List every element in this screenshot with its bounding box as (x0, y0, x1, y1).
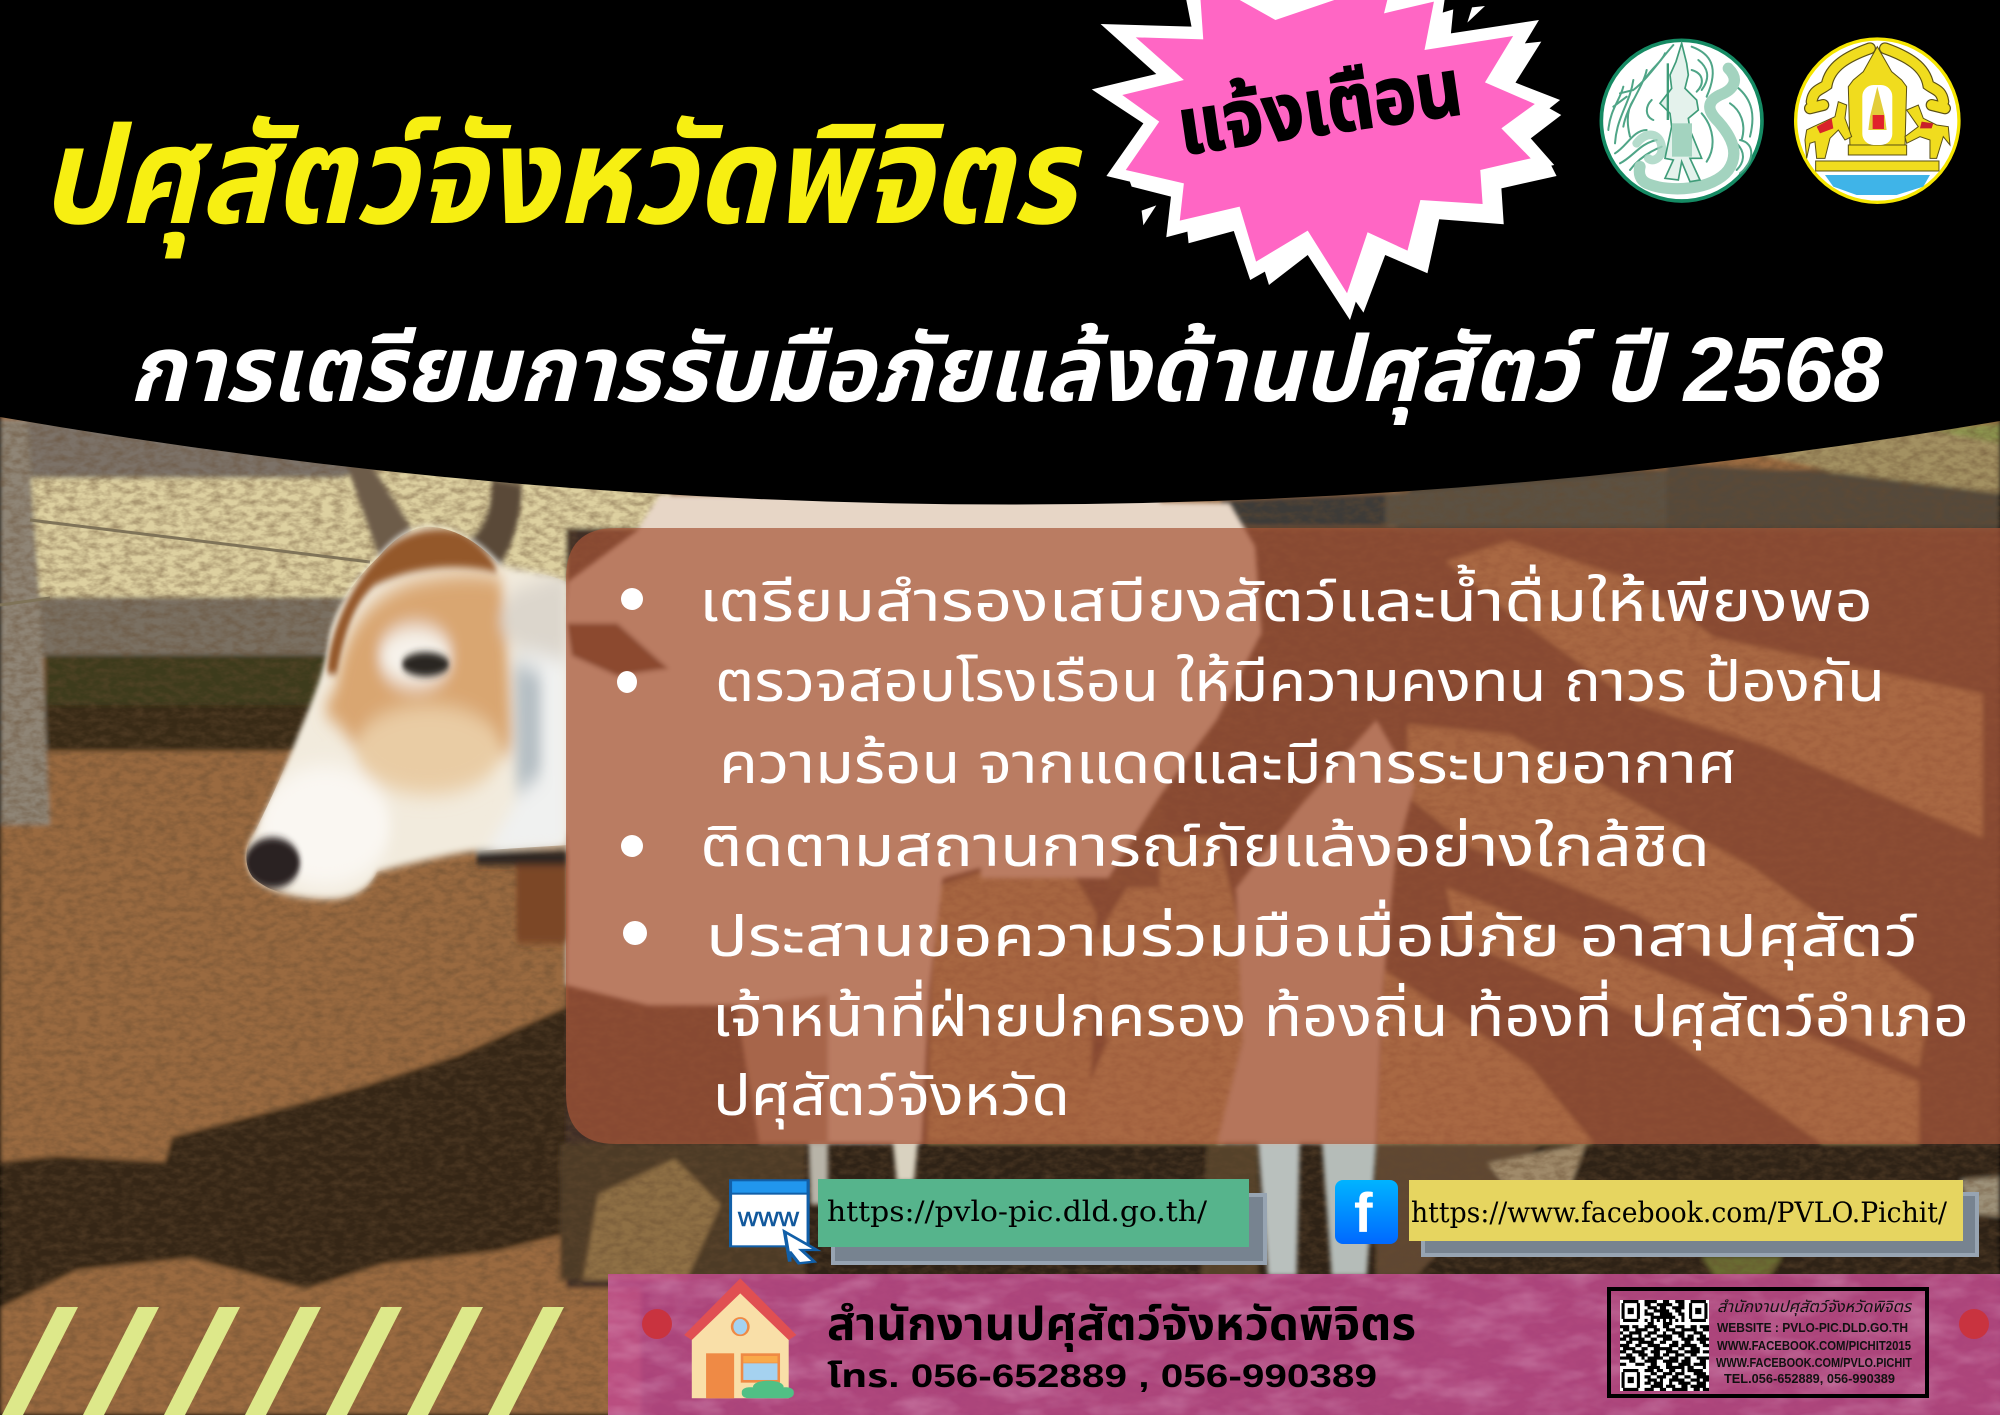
QR card text: TEL.056-652889, 056-990389 (1724, 1372, 1895, 1386)
corner stripes (2, 1307, 564, 1415)
bullet 2: ความร้อน จากแดดและมีการระบายอากาศ (719, 732, 1737, 795)
ornament scrolls (1608, 45, 1752, 173)
temple gate and animals (1805, 47, 1950, 171)
background photo: cow in a pen (0, 400, 2000, 1415)
right red dot (1959, 1309, 1989, 1339)
bullet 3: ติดตามสถานการณ์ภัยแล้งอย่างใกล้ชิด (700, 815, 1710, 878)
ground grain texture (0, 420, 2000, 1415)
bullet 4: ปศุสัตว์จังหวัด (713, 1064, 1070, 1129)
QR card text (1716, 1299, 1912, 1386)
bullet 4: เจ้าหน้าที่ฝ่ายปกครอง ท้องถิ่น ท้องที่ ปศุสัตว์อำเภอ (712, 979, 1969, 1050)
subtitle: การเตรียมการรับมือภัยแล้งด้านปศุสัตว์ ปี 2568 (129, 319, 1884, 426)
bullet 4: ประสานขอความร่วมมือเมื่อมีภัย อาสาปศุสัตว์ (706, 899, 1918, 970)
standing deity figure (1660, 43, 1702, 182)
starburst badge: alert (1092, 0, 1561, 320)
bullet 2: ตรวจสอบโรงเรือน ให้มีความคงทน ถาวร ป้องกัน (715, 650, 1885, 713)
icon: facebook (1335, 1180, 1398, 1244)
office name: สำนักงานปศุสัตว์จังหวัดพิจิตร (827, 1298, 1416, 1352)
fence wire (0, 520, 370, 605)
link: facebook page (1409, 1180, 1977, 1255)
QR card text: สำนักงานปศุสัตว์จังหวัดพิจิตร (1717, 1299, 1912, 1317)
title: ปศุสัตว์จังหวัดพิจิตร (40, 100, 1083, 259)
scrolling arms (1810, 48, 1945, 108)
footer band (608, 1274, 2000, 1415)
QR card (1609, 1289, 1927, 1396)
link: website (818, 1179, 1265, 1263)
naga body (1637, 68, 1734, 189)
link: facebook page: https://www.facebook.com/PVLO.Pichit/ (1411, 1196, 1948, 1229)
straw seen through the panel (1064, 449, 2000, 1143)
www label: www (737, 1202, 800, 1232)
link: website: https://pvlo-pic.dld.go.th/ (827, 1195, 1208, 1228)
bullet 4 (623, 899, 1969, 1129)
logo: department seal (yellow) (1796, 39, 1959, 202)
left red dot (642, 1309, 672, 1339)
cow head and neck (245, 458, 566, 943)
cow body under panel (560, 495, 1415, 1276)
top right fence and straw (1221, 423, 2000, 527)
QR code (1620, 1300, 1709, 1391)
ground, fence and straw (0, 400, 2000, 1415)
panel: advice list (566, 528, 2000, 1144)
icon: facebook: f (1354, 1181, 1373, 1244)
bullet 2 (617, 650, 1885, 795)
phone numbers: โทร. 056-652889 , 056-990389 (827, 1358, 1377, 1394)
QR card text: WEBSITE : PVLO-PIC.DLD.GO.TH (1717, 1321, 1908, 1335)
badge text: แจ้งเตือน (1172, 42, 1467, 172)
bullet 1: เตรียมสำรองเสบียงสัตว์และน้ำดื่มให้เพียงพอ (699, 564, 1873, 633)
second cow (1217, 720, 1415, 1143)
icon: house (684, 1278, 796, 1398)
lower ground (640, 1144, 2000, 1415)
logo: provincial seal (green) (1601, 40, 1762, 201)
black header band with curved edge (0, 0, 2000, 505)
QR card text: WWW.FACEBOOK.COM/PICHIT2015 (1717, 1339, 1911, 1353)
QR card text: WWW.FACEBOOK.COM/PVLO.PICHIT (1716, 1356, 1912, 1370)
icon: www browser window (731, 1180, 817, 1263)
